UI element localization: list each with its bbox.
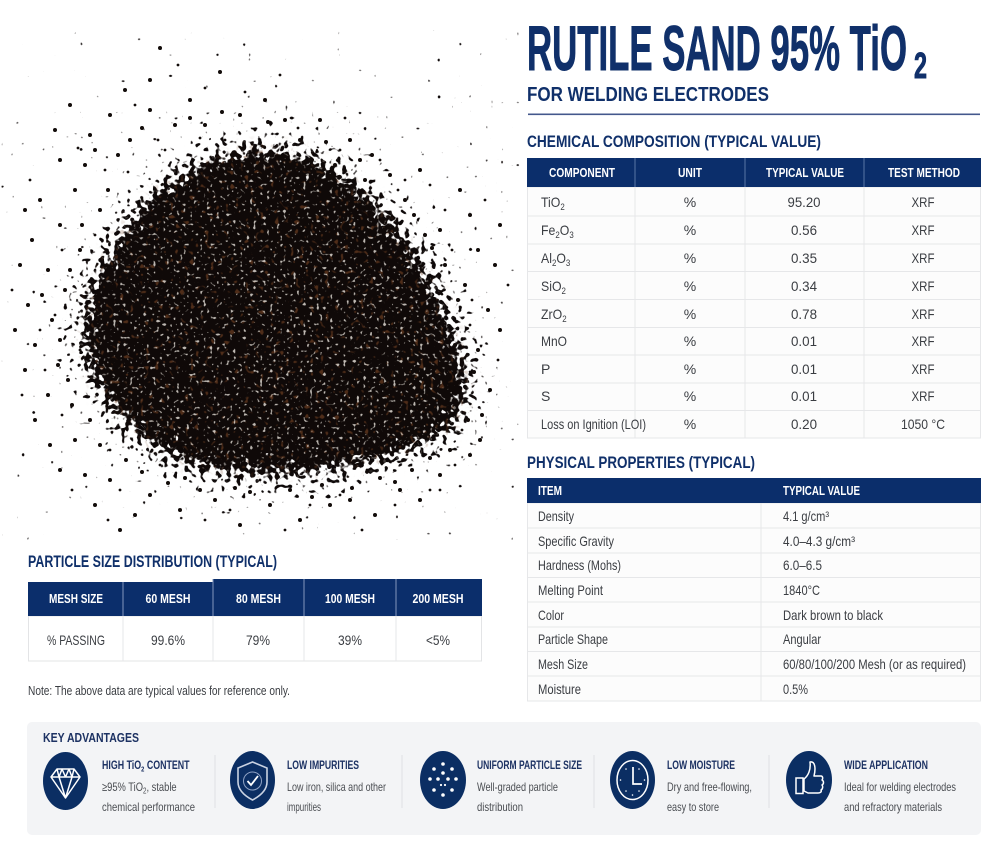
table: chemical composition: % (684, 388, 696, 404)
table: chemical composition: XRF (912, 306, 934, 322)
table: chemical composition: 1050 °C (901, 416, 945, 432)
table: chemical composition: XRF (912, 333, 934, 349)
table: particle size distribution: 99.6% (151, 632, 185, 648)
table: chemical composition: 2 (562, 286, 566, 296)
table: chemical composition: TiO (541, 194, 560, 210)
heading: physical properties: PHYSICAL PROPERTIES (TYPICAL) (527, 454, 755, 472)
advantage: low moisture: Dry and free-flowing, (667, 780, 752, 794)
table: physical properties: 0.5% (783, 681, 808, 697)
advantage: low impurities: LOW IMPURITIES (287, 760, 359, 772)
table: chemical composition: 2 (552, 258, 557, 268)
heading: key advantages: KEY ADVANTAGES (43, 730, 139, 745)
table: chemical composition: 0.20 (791, 416, 817, 432)
table: physical properties: Color (538, 607, 564, 623)
table: chemical composition: % (684, 250, 696, 266)
advantage: wide application: Ideal for welding electrodes (844, 780, 956, 794)
table: chemical composition: 0.35 (791, 250, 817, 266)
table: physical properties: 6.0–6.5 (783, 557, 822, 573)
advantage: uniform particle size: UNIFORM PARTICLE SIZE (477, 760, 582, 772)
subtitle: FOR WELDING ELECTRODES (527, 83, 769, 106)
table: chemical composition: XRF (912, 388, 934, 404)
advantage: high TiO2 content: 2 (143, 787, 146, 796)
table: particle size distribution: 200 MESH (412, 592, 464, 606)
advantage: uniform particle size: Well-graded particle (477, 780, 558, 794)
table: chemical composition: O (560, 222, 569, 238)
table: particle size distribution (28, 579, 482, 661)
heading: particle size distribution: PARTICLE SIZE DISTRIBUTION (TYPICAL) (28, 553, 277, 571)
advantage: low moisture: LOW MOISTURE (667, 760, 735, 772)
advantage: high TiO2 content: CONTENT (144, 760, 190, 772)
table: chemical composition: XRF (912, 222, 934, 238)
advantage: high TiO2 content: , stable (146, 781, 177, 794)
table: physical properties: 1840°C (783, 582, 820, 598)
table: physical properties: Melting Point (538, 582, 603, 598)
advantage: high TiO2 content: HIGH TiO (102, 760, 141, 772)
table: chemical composition: TYPICAL VALUE (766, 166, 844, 180)
table: particle size distribution: 39% (338, 632, 362, 648)
table: chemical composition: 0.78 (791, 306, 817, 322)
table: physical properties: 4.0–4.3 g/cm³ (783, 533, 855, 549)
table: chemical composition: MnO (541, 333, 567, 349)
icon: thumbs up (786, 751, 832, 809)
advantage: low moisture: easy to store (667, 800, 719, 814)
table: particle size distribution: 79% (246, 632, 270, 648)
table: physical properties: Particle Shape (538, 631, 608, 647)
table: chemical composition: Fe (541, 222, 555, 238)
table: chemical composition: S (541, 388, 550, 404)
table: chemical composition: 0.01 (791, 333, 817, 349)
table: chemical composition: % (684, 194, 696, 210)
advantage: low impurities: Low iron, silica and other (287, 780, 386, 794)
table: chemical composition: 0.01 (791, 361, 817, 377)
table: chemical composition: 0.56 (791, 222, 817, 238)
advantage: wide application: WIDE APPLICATION (844, 760, 928, 772)
heading: chemical composition: CHEMICAL COMPOSITION (TYPICAL VALUE) (527, 133, 821, 151)
table: physical properties: Moisture (538, 681, 581, 697)
icon: particle dots (420, 751, 466, 809)
table: chemical composition: 0.01 (791, 388, 817, 404)
table: chemical composition: % (684, 416, 696, 432)
table: chemical composition: 3 (566, 258, 571, 268)
table: physical properties (527, 478, 981, 701)
advantage: low moisture (667, 760, 752, 814)
table: chemical composition: 3 (569, 230, 574, 240)
table: chemical composition: XRF (912, 361, 934, 377)
icon: diamond (43, 752, 88, 810)
icon: shield with check (230, 751, 275, 809)
table: physical properties: TYPICAL VALUE (783, 484, 860, 498)
table: chemical composition: XRF (912, 250, 934, 266)
table: chemical composition: SiO (541, 278, 562, 294)
table: chemical composition: 2 (560, 202, 565, 212)
advantage: uniform particle size (477, 760, 582, 814)
table: physical properties: Dark brown to black (783, 607, 884, 623)
table: chemical composition: UNIT (678, 166, 702, 180)
icon: clock (610, 751, 655, 809)
table: chemical composition: % (684, 306, 696, 322)
table: chemical composition: % (684, 278, 696, 294)
table: physical properties: Density (538, 508, 574, 524)
table: particle size distribution: % PASSING (47, 632, 105, 648)
table: particle size distribution: 100 MESH (325, 592, 375, 606)
table: chemical composition: Al (541, 250, 552, 266)
table: chemical composition: 2 (562, 314, 567, 324)
table: chemical composition: 95.20 (788, 194, 821, 210)
advantage: high TiO2 content: 2 (141, 766, 145, 774)
advantage: high TiO2 content (102, 760, 195, 814)
table: chemical composition: P (541, 361, 550, 377)
table: physical properties: 4.1 g/cm³ (783, 508, 829, 524)
table: physical properties: ITEM (538, 484, 562, 498)
table: chemical composition: XRF (912, 278, 934, 294)
table: chemical composition: % (684, 333, 696, 349)
table: chemical composition: ZrO (541, 306, 562, 322)
table: chemical composition: O (556, 250, 566, 266)
table: chemical composition: % (684, 361, 696, 377)
table: particle size distribution: 80 MESH (236, 592, 281, 606)
table: chemical composition: % (684, 222, 696, 238)
advantage: low impurities (287, 760, 386, 814)
advantage: wide application: and refractory materials (844, 800, 942, 814)
table: physical properties: Angular (783, 631, 821, 647)
note: Note: The above data are typical values for reference only. (28, 684, 290, 698)
table: chemical composition: 0.34 (791, 278, 817, 294)
advantage: high TiO2 content: chemical performance (102, 800, 195, 814)
table: chemical composition: 2 (555, 230, 560, 240)
advantage: low impurities: impurities (287, 800, 321, 814)
table: particle size distribution: <5% (426, 632, 450, 648)
image: rutile sand pile (12, 48, 508, 530)
table: chemical composition: TEST METHOD (888, 166, 960, 180)
panel: key advantages (27, 722, 981, 835)
advantage: uniform particle size: distribution (477, 800, 523, 814)
table: particle size distribution: MESH SIZE (49, 592, 103, 606)
table: chemical composition (527, 158, 981, 438)
table: chemical composition: XRF (912, 194, 934, 210)
table: chemical composition: Loss on Ignition (LOI) (541, 416, 646, 432)
table: physical properties: Mesh Size (538, 656, 588, 672)
advantage: wide application (844, 760, 956, 814)
title: 2 (914, 45, 927, 86)
table: physical properties: Specific Gravity (538, 533, 614, 549)
advantage: high TiO2 content: ≥95% TiO (102, 781, 143, 794)
table: chemical composition: COMPONENT (549, 166, 615, 180)
table: physical properties: Hardness (Mohs) (538, 557, 621, 573)
table: particle size distribution: 60 MESH (146, 592, 190, 606)
